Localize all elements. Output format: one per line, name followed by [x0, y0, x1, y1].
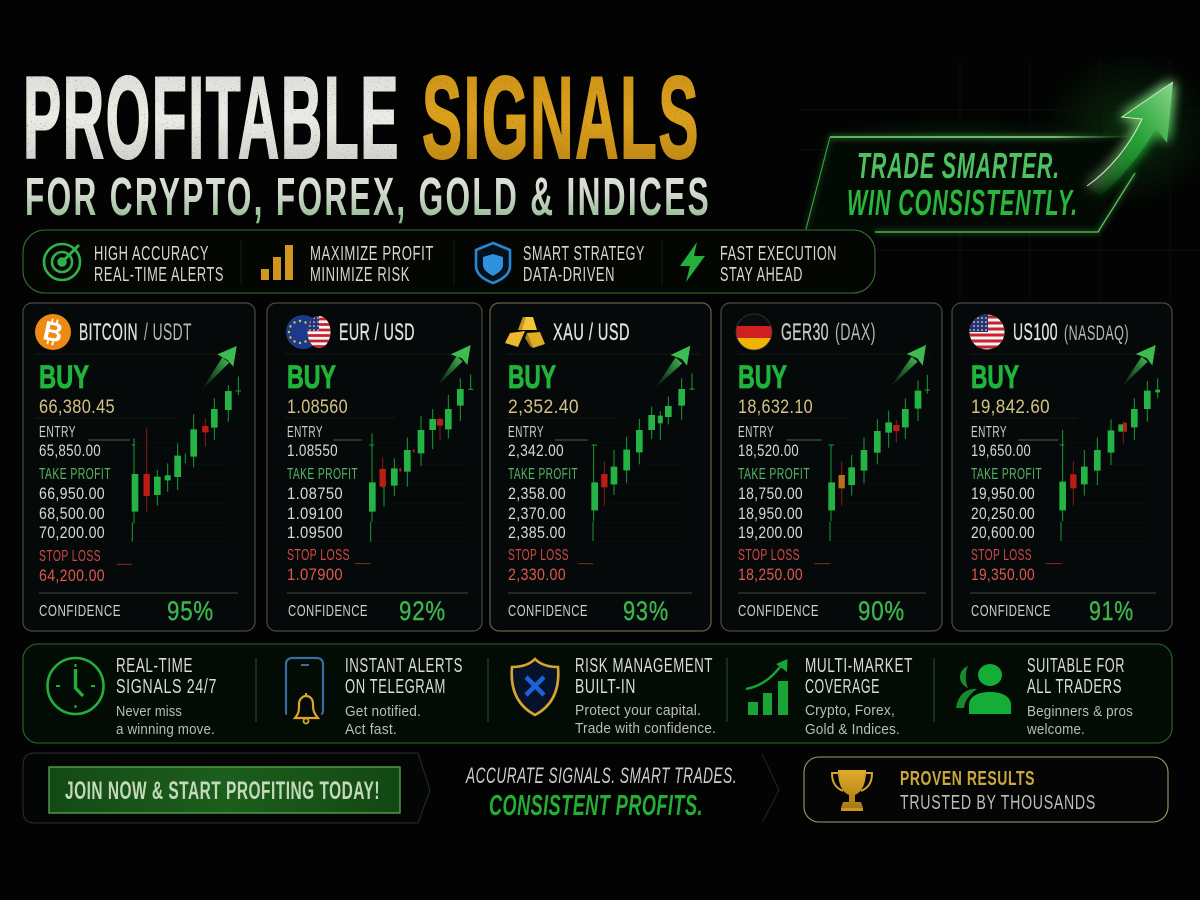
confidence: CONFIDENCE: [288, 603, 368, 620]
stop loss: STOP LOSS: [287, 547, 350, 564]
confidence: [971, 596, 1134, 626]
take profit: 19,200.00: [738, 523, 803, 542]
benefit: multi-market: Gold & Indices.: [805, 721, 900, 738]
stop loss: STOP LOSS: [508, 547, 569, 564]
price: 1.08560: [287, 397, 348, 418]
take profit: 18,950.00: [738, 504, 803, 523]
icon: bitcoin: [35, 314, 71, 350]
icon: risk shield: [512, 659, 558, 715]
strip text: profit: MAXIMIZE PROFIT: [310, 243, 434, 265]
arrow: rising green: [1087, 82, 1173, 196]
strip text: accuracy: [94, 243, 224, 286]
pair name: (DAX): [835, 319, 876, 346]
benefit: risk management: Protect your capital.: [575, 702, 701, 719]
take profit: [508, 466, 578, 542]
stop loss: [738, 547, 803, 584]
take profit: [971, 466, 1042, 542]
subtitle: FOR CRYPTO, FOREX, GOLD & INDICES: [25, 167, 711, 227]
icon: phone and bell: [286, 658, 323, 724]
icon: clock: [48, 658, 104, 714]
candlestick chart: [1018, 345, 1158, 564]
strip text: execution: FAST EXECUTION: [720, 243, 837, 265]
entry: [971, 424, 1031, 460]
take profit: 2,358.00: [508, 484, 566, 503]
benefit: real-time: Never miss: [116, 703, 182, 720]
signal buy: BUY: [738, 359, 787, 395]
slogan: CONSISTENT PROFITS.: [489, 790, 703, 822]
take profit: [287, 466, 358, 542]
benefit: telegram: INSTANT ALERTS: [345, 655, 463, 677]
icon: blue shield: [476, 243, 510, 283]
tagline text: [847, 145, 1078, 223]
icon: people: [956, 664, 1011, 714]
take profit: 1.08750: [287, 484, 343, 503]
benefit: real-time: [116, 655, 217, 738]
benefit: real-time: REAL-TIME: [116, 655, 193, 677]
price: 18,632.10: [738, 397, 813, 418]
benefit: telegram: ON TELEGRAM: [345, 676, 446, 698]
stop loss: 18,250.00: [738, 565, 803, 584]
benefit: multi-market: COVERAGE: [805, 676, 880, 698]
confidence: 95%: [167, 596, 214, 626]
confidence: [39, 596, 214, 626]
confidence: [508, 596, 669, 626]
benefit: all traders: Beginners & pros: [1027, 703, 1133, 720]
take profit: 1.09100: [287, 504, 343, 523]
confidence: 93%: [623, 596, 669, 626]
icon: gold bars: [261, 245, 293, 280]
button: JOIN NOW & START PROFITING TODAY!: [65, 777, 380, 805]
candlestick chart: [333, 345, 473, 564]
benefit: all traders: welcome.: [1026, 721, 1085, 738]
benefit: real-time: a winning move.: [116, 721, 215, 738]
confidence: CONFIDENCE: [508, 603, 588, 620]
icon: market bars and arrow: [746, 659, 788, 715]
card: EUR / USD: [267, 303, 482, 631]
benefit: risk management: [575, 655, 716, 737]
pair name: (NASDAQ): [1064, 322, 1129, 345]
icon: gold bars: [505, 317, 545, 348]
proven text: [900, 768, 1096, 814]
pair name: [1013, 319, 1129, 346]
title: Profitable Signals: SIGNALS: [422, 52, 700, 183]
benefit: all traders: [1026, 655, 1133, 738]
stop loss: [287, 547, 350, 584]
confidence: 92%: [399, 596, 446, 626]
benefit: multi-market: Crypto, Forex,: [805, 702, 895, 719]
pair name: BITCOIN: [79, 319, 138, 346]
take profit: 70,200.00: [39, 523, 105, 542]
benefit: multi-market: MULTI-MARKET: [805, 655, 913, 677]
stop loss: [971, 547, 1035, 584]
entry: ENTRY: [508, 424, 544, 441]
benefit: risk management: Trade with confidence.: [575, 720, 716, 737]
entry: [508, 424, 564, 460]
take profit: 18,750.00: [738, 484, 803, 503]
take profit: TAKE PROFIT: [738, 466, 810, 483]
confidence: [288, 596, 446, 626]
strip text: strategy: SMART STRATEGY: [523, 243, 645, 265]
take profit: 68,500.00: [39, 504, 105, 523]
signal buy: BUY: [508, 359, 556, 395]
take profit: [39, 466, 111, 542]
benefit: all traders: ALL TRADERS: [1027, 676, 1122, 698]
entry: 18,520.00: [738, 441, 799, 460]
stop loss: [508, 547, 569, 584]
entry: [39, 424, 101, 460]
confidence: 91%: [1089, 596, 1134, 626]
benefits panel: [23, 644, 1172, 743]
strip text: profit: MINIMIZE RISK: [310, 264, 410, 286]
proven results box: [804, 757, 1168, 822]
title: Profitable Signals: PROFITABLE: [23, 52, 400, 183]
signal buy: BUY: [971, 359, 1019, 395]
take profit: 2,385.00: [508, 523, 566, 542]
icon: euro and US flags: [286, 315, 334, 349]
take profit: 1.09500: [287, 523, 343, 542]
confidence: CONFIDENCE: [39, 603, 121, 620]
take profit: 2,370.00: [508, 504, 566, 523]
candlestick chart: [88, 346, 241, 564]
stop loss: 19,350.00: [971, 565, 1035, 584]
entry: ENTRY: [738, 424, 774, 441]
button: [49, 767, 400, 813]
strip text: profit: [310, 243, 434, 286]
benefit: all traders: SUITABLE FOR: [1027, 655, 1125, 677]
entry: 19,650.00: [971, 441, 1031, 460]
icon: target: [44, 244, 80, 280]
take profit: TAKE PROFIT: [39, 466, 111, 483]
take profit: TAKE PROFIT: [287, 466, 358, 483]
entry: [738, 424, 799, 460]
confidence: [738, 596, 905, 626]
benefit: real-time: SIGNALS 24/7: [116, 676, 217, 698]
card: GER30 (DAX): [721, 303, 942, 631]
price: 66,380.45: [39, 397, 115, 418]
confidence: CONFIDENCE: [738, 603, 819, 620]
confidence: CONFIDENCE: [971, 603, 1051, 620]
price: 2,352.40: [508, 397, 579, 418]
candlestick chart: [787, 345, 930, 564]
pair name: GER30: [781, 319, 829, 346]
tagline banner with arrow: [805, 82, 1173, 232]
signal buy: BUY: [287, 359, 336, 395]
pair name: US100: [1013, 319, 1058, 346]
strip text: strategy: [523, 243, 645, 286]
entry: 65,850.00: [39, 441, 101, 460]
price: 19,842.60: [971, 397, 1050, 418]
strip text: accuracy: REAL-TIME ALERTS: [94, 264, 224, 286]
proven text: TRUSTED BY THOUSANDS: [900, 792, 1096, 814]
icon: US flag: [970, 314, 1004, 350]
stop loss: STOP LOSS: [39, 548, 101, 565]
benefit: telegram: [345, 655, 463, 738]
card: XAU / USD: [490, 303, 711, 631]
benefit: risk management: BUILT-IN: [575, 676, 636, 698]
stop loss: 2,330.00: [508, 565, 566, 584]
feature strip: [23, 230, 875, 293]
entry: ENTRY: [39, 424, 76, 441]
take profit: [738, 466, 810, 542]
proven text: PROVEN RESULTS: [900, 768, 1035, 790]
benefit: telegram: Get notified.: [345, 703, 421, 720]
entry: 2,342.00: [508, 441, 564, 460]
stop loss: [39, 548, 105, 585]
call to action: [23, 753, 430, 823]
take profit: 19,950.00: [971, 484, 1035, 503]
pair name: EUR / USD: [339, 319, 415, 346]
stop loss: 1.07900: [287, 565, 343, 584]
icon: trophy: [832, 770, 872, 811]
stop loss: 64,200.00: [39, 566, 105, 585]
strip text: accuracy: HIGH ACCURACY: [94, 243, 209, 265]
tagline text: TRADE SMARTER.: [857, 145, 1060, 186]
pair name: XAU / USD: [553, 319, 630, 346]
icon: lightning bolt: [680, 242, 705, 282]
stop loss: STOP LOSS: [971, 547, 1032, 564]
strip text: strategy: DATA-DRIVEN: [523, 264, 615, 286]
entry: ENTRY: [287, 424, 323, 441]
card: US100 (NASDAQ): [952, 303, 1172, 631]
take profit: TAKE PROFIT: [971, 466, 1042, 483]
stop loss: STOP LOSS: [738, 547, 800, 564]
pair name: / USDT: [144, 319, 192, 346]
benefit: telegram: Act fast.: [345, 721, 397, 738]
icon: bitcoin: B: [40, 315, 66, 349]
signal buy: BUY: [39, 359, 89, 395]
take profit: 66,950.00: [39, 484, 105, 503]
take profit: 20,250.00: [971, 504, 1035, 523]
take profit: TAKE PROFIT: [508, 466, 578, 483]
entry: ENTRY: [971, 424, 1007, 441]
slogan: [465, 754, 779, 823]
take profit: 20,600.00: [971, 523, 1035, 542]
entry: 1.08550: [287, 441, 338, 460]
candlestick chart: [555, 346, 695, 564]
slogan: ACCURATE SIGNALS. SMART TRADES.: [465, 763, 737, 788]
benefit: multi-market: [805, 655, 913, 738]
entry: [287, 424, 338, 460]
strip text: execution: [720, 243, 837, 286]
confidence: 90%: [858, 596, 905, 626]
card: Bitcoin / USDT: [23, 303, 255, 631]
icon: German flag: [735, 314, 773, 350]
strip text: execution: STAY AHEAD: [720, 264, 803, 286]
benefit: risk management: RISK MANAGEMENT: [575, 655, 713, 677]
